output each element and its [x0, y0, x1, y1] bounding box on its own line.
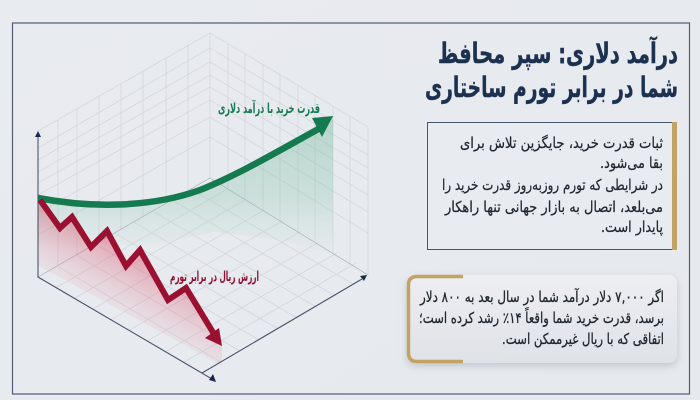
description text: می‌بلعد، اتصال به بازار جهانی تنها راهکار: [444, 198, 663, 216]
description text: [442, 134, 663, 237]
description text: ثبات قدرت خرید، جایگزین تلاش برای: [460, 134, 663, 152]
callout: example: [407, 275, 677, 363]
description text: پایدار است.: [601, 218, 663, 237]
gold bracket: [408, 276, 463, 362]
title: [425, 36, 678, 104]
chart grid walls and floor: [38, 33, 374, 373]
callout text: [419, 288, 664, 348]
green curve arrow: [38, 116, 333, 205]
label: purchasing power: قدرت خرید با درآمد دلاری: [218, 99, 320, 117]
axes: [35, 131, 367, 382]
label: rial value: ارزش ریال در برابر تورم: [170, 269, 259, 285]
panel: description: [428, 122, 677, 250]
red area under decline: [38, 200, 222, 366]
gold accent bar: [672, 122, 677, 250]
description text: بقا می‌شود.: [600, 154, 663, 172]
red decline arrow: [40, 200, 222, 346]
green area under curve: [38, 116, 333, 256]
callout text: اگر ۷,۰۰۰ دلار درآمد شما در سال بعد به ۸۰۰ دلار: [419, 288, 664, 306]
isometric chart: [35, 33, 374, 382]
callout text: برسد، قدرت خرید شما واقعاً ۱۴٪ رشد کرده است؛: [419, 307, 664, 327]
